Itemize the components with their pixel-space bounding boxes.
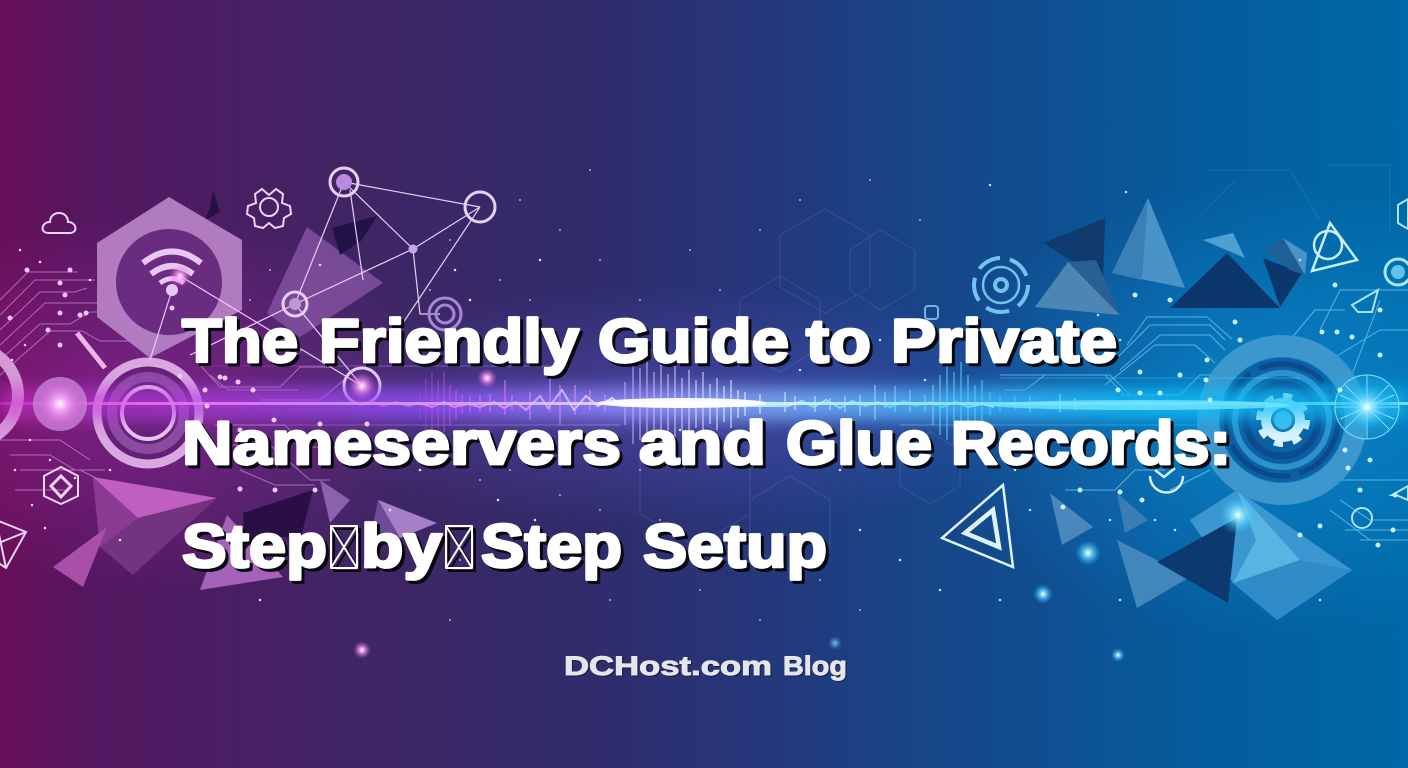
- icon: gear: [1259, 396, 1307, 444]
- polygon: upper purple prism: [205, 190, 383, 337]
- title line 1: Guide: [598, 307, 789, 375]
- title line 3: Step: [481, 512, 622, 580]
- polygon: upper blue prisms: [1035, 198, 1307, 315]
- title line 2: and: [639, 409, 766, 477]
- diagonal pink bar: [77, 333, 105, 368]
- glowing flare, left: [33, 377, 87, 431]
- polygon: lower blue prisms: [1050, 490, 1352, 620]
- icon: hexagon flower: [247, 189, 291, 228]
- icon: badge: [1352, 290, 1378, 312]
- icon: check clock: [1150, 468, 1183, 493]
- icon: shield: [1392, 486, 1408, 500]
- left cluster of polygons: [53, 190, 437, 590]
- big arc at left edge: [0, 347, 18, 443]
- small glow points: [169, 265, 1258, 662]
- icon: small globe: [1352, 508, 1372, 528]
- footer: blog name: DCHost.com: [564, 651, 772, 681]
- title line 2: Nameservers: [182, 409, 621, 477]
- title line 3: Setup: [643, 512, 827, 580]
- footer: blog name: Blog: [783, 651, 847, 681]
- network graph: [150, 168, 495, 404]
- light streaks: [200, 366, 1300, 425]
- title line 1: [182, 307, 1117, 375]
- star particles and circuit nodes: [10, 170, 1395, 620]
- right circuit traces: [1000, 290, 1408, 540]
- title line 2: Records:: [951, 409, 1231, 477]
- title line 2: [182, 409, 1231, 477]
- waveform beam: [0, 360, 1408, 450]
- outline triangle icon, upper right: [1312, 223, 1357, 271]
- target icon: [974, 258, 1028, 312]
- polygon: lower pink prism: [53, 477, 437, 590]
- title line 1: The: [182, 307, 298, 375]
- icon: wifi: [143, 252, 201, 296]
- wifi hexagon badge: [97, 197, 242, 358]
- title line 2: Glue: [786, 409, 932, 477]
- icon: hex top right: [1398, 199, 1408, 229]
- title line 3: Step: [182, 512, 327, 580]
- title line 1: Friendly: [319, 307, 579, 375]
- missing-glyph box 2: [446, 526, 472, 568]
- footer: blog name: [564, 651, 847, 681]
- title: [182, 307, 1231, 580]
- glowing flare, right: [1335, 375, 1399, 439]
- title line 3: by: [361, 512, 442, 580]
- waveform bars: [420, 360, 1075, 450]
- missing-glyph box 1: [331, 526, 357, 568]
- left circuit traces: [0, 272, 345, 490]
- gear ring emblem: [1208, 346, 1356, 494]
- icon: circle node: [1385, 259, 1408, 285]
- icon: cloud: [43, 213, 75, 233]
- icon: rounded square: [925, 306, 938, 319]
- title line 1: Private: [891, 307, 1117, 375]
- title line 3: [182, 512, 827, 580]
- title line 1: to: [806, 307, 871, 375]
- left concentric ring: [93, 358, 203, 468]
- icon: crystal: [0, 520, 26, 568]
- jagged waveform line: [360, 390, 994, 410]
- outline triangle icon, lower center: [942, 485, 1013, 567]
- small right icons: [925, 199, 1408, 528]
- icon: hexagon diamond: [44, 467, 78, 504]
- outline icons, left: [0, 189, 291, 568]
- right cluster of polygons: [1035, 198, 1352, 620]
- faint hexagon pattern: [640, 165, 1390, 570]
